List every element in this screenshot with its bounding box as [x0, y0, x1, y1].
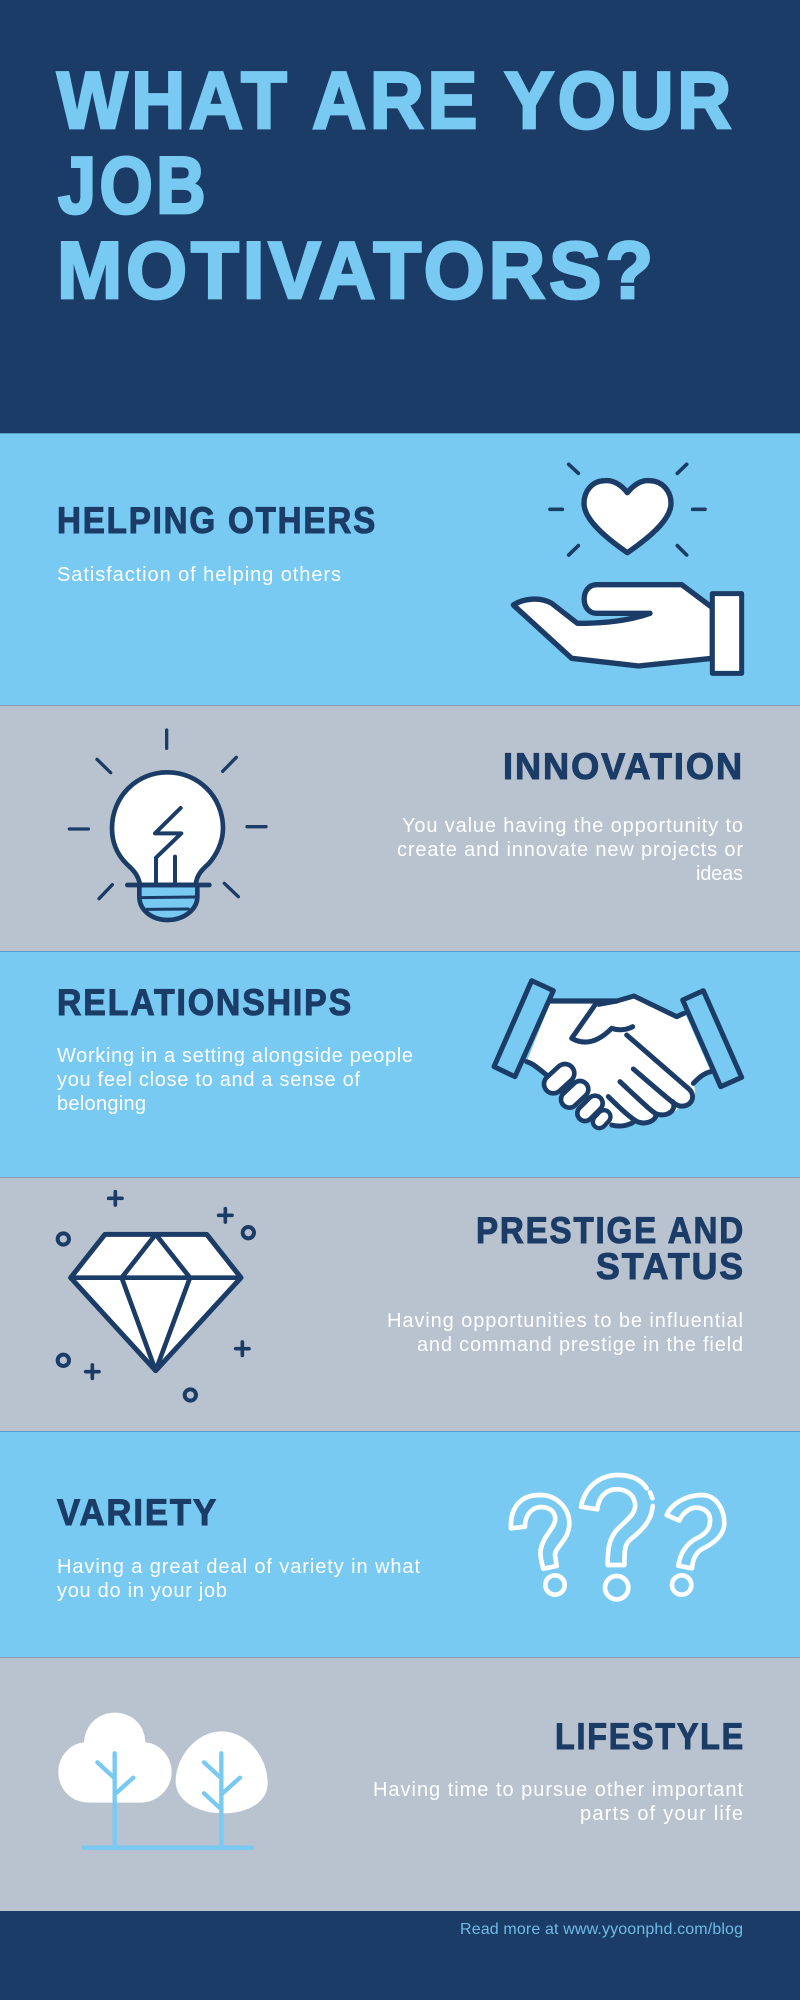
- text: lifestyle description: parts of your life: [580, 1803, 743, 1825]
- icon: handshake: [494, 981, 742, 1127]
- text: relationships description: belonging: [57, 1093, 146, 1115]
- heading: helping others: HELPING OTHERS: [57, 500, 377, 541]
- heading: relationships: RELATIONSHIPS: [57, 982, 353, 1023]
- panel: lifestyle: [0, 1657, 800, 1911]
- title: MOTIVATORS?: [57, 226, 657, 316]
- panel: helping others: [0, 433, 800, 705]
- heading: variety: VARIETY: [57, 1492, 218, 1533]
- panel: variety: [0, 1431, 800, 1657]
- title: [57, 56, 735, 316]
- text: prestige description: and command prestige in the field: [417, 1334, 743, 1356]
- text: lifestyle description: Having time to pursue other important: [373, 1779, 743, 1801]
- title: JOB: [58, 141, 209, 231]
- panel: title background: [0, 0, 800, 433]
- icon: hand holding heart: [513, 464, 742, 673]
- text: footer link: Read more at www.yyoonphd.com/blog: [460, 1921, 743, 1938]
- title: WHAT ARE YOUR: [57, 56, 735, 146]
- panel: footer: [0, 1911, 800, 2000]
- text: variety description: [57, 1556, 420, 1602]
- text: helping others description: Satisfaction of helping others: [57, 564, 341, 586]
- icon: light bulb: [69, 730, 266, 920]
- text: relationships description: you feel close to and a sense of: [57, 1069, 360, 1091]
- text: relationships description: Working in a setting alongside people: [57, 1045, 413, 1067]
- text: prestige description: Having opportunities to be influential: [387, 1310, 743, 1332]
- text: variety description: you do in your job: [57, 1580, 227, 1602]
- heading: lifestyle: LIFESTYLE: [555, 1716, 745, 1757]
- text: innovation description: You value having the opportunity to: [402, 815, 743, 837]
- text: innovation description: create and innovate new projects or: [397, 839, 743, 861]
- text: relationships description: [57, 1045, 413, 1115]
- text: innovation description: [397, 815, 743, 885]
- icon: trees: [58, 1713, 268, 1848]
- text: innovation description: ideas: [696, 863, 743, 885]
- panel: relationships: [0, 951, 800, 1177]
- heading: prestige and status: PRESTIGE AND: [476, 1210, 745, 1251]
- text: variety description: Having a great deal of variety in what: [57, 1556, 420, 1578]
- text: prestige description: [387, 1310, 743, 1356]
- icon: question marks: [511, 1475, 724, 1599]
- heading: prestige and status: [476, 1210, 745, 1287]
- icon: diamond: [58, 1192, 254, 1401]
- panel: innovation: [0, 705, 800, 951]
- heading: prestige and status: STATUS: [596, 1246, 745, 1287]
- panel: prestige and status: [0, 1177, 800, 1431]
- text: lifestyle description: [373, 1779, 743, 1825]
- heading: innovation: INNOVATION: [503, 746, 744, 787]
